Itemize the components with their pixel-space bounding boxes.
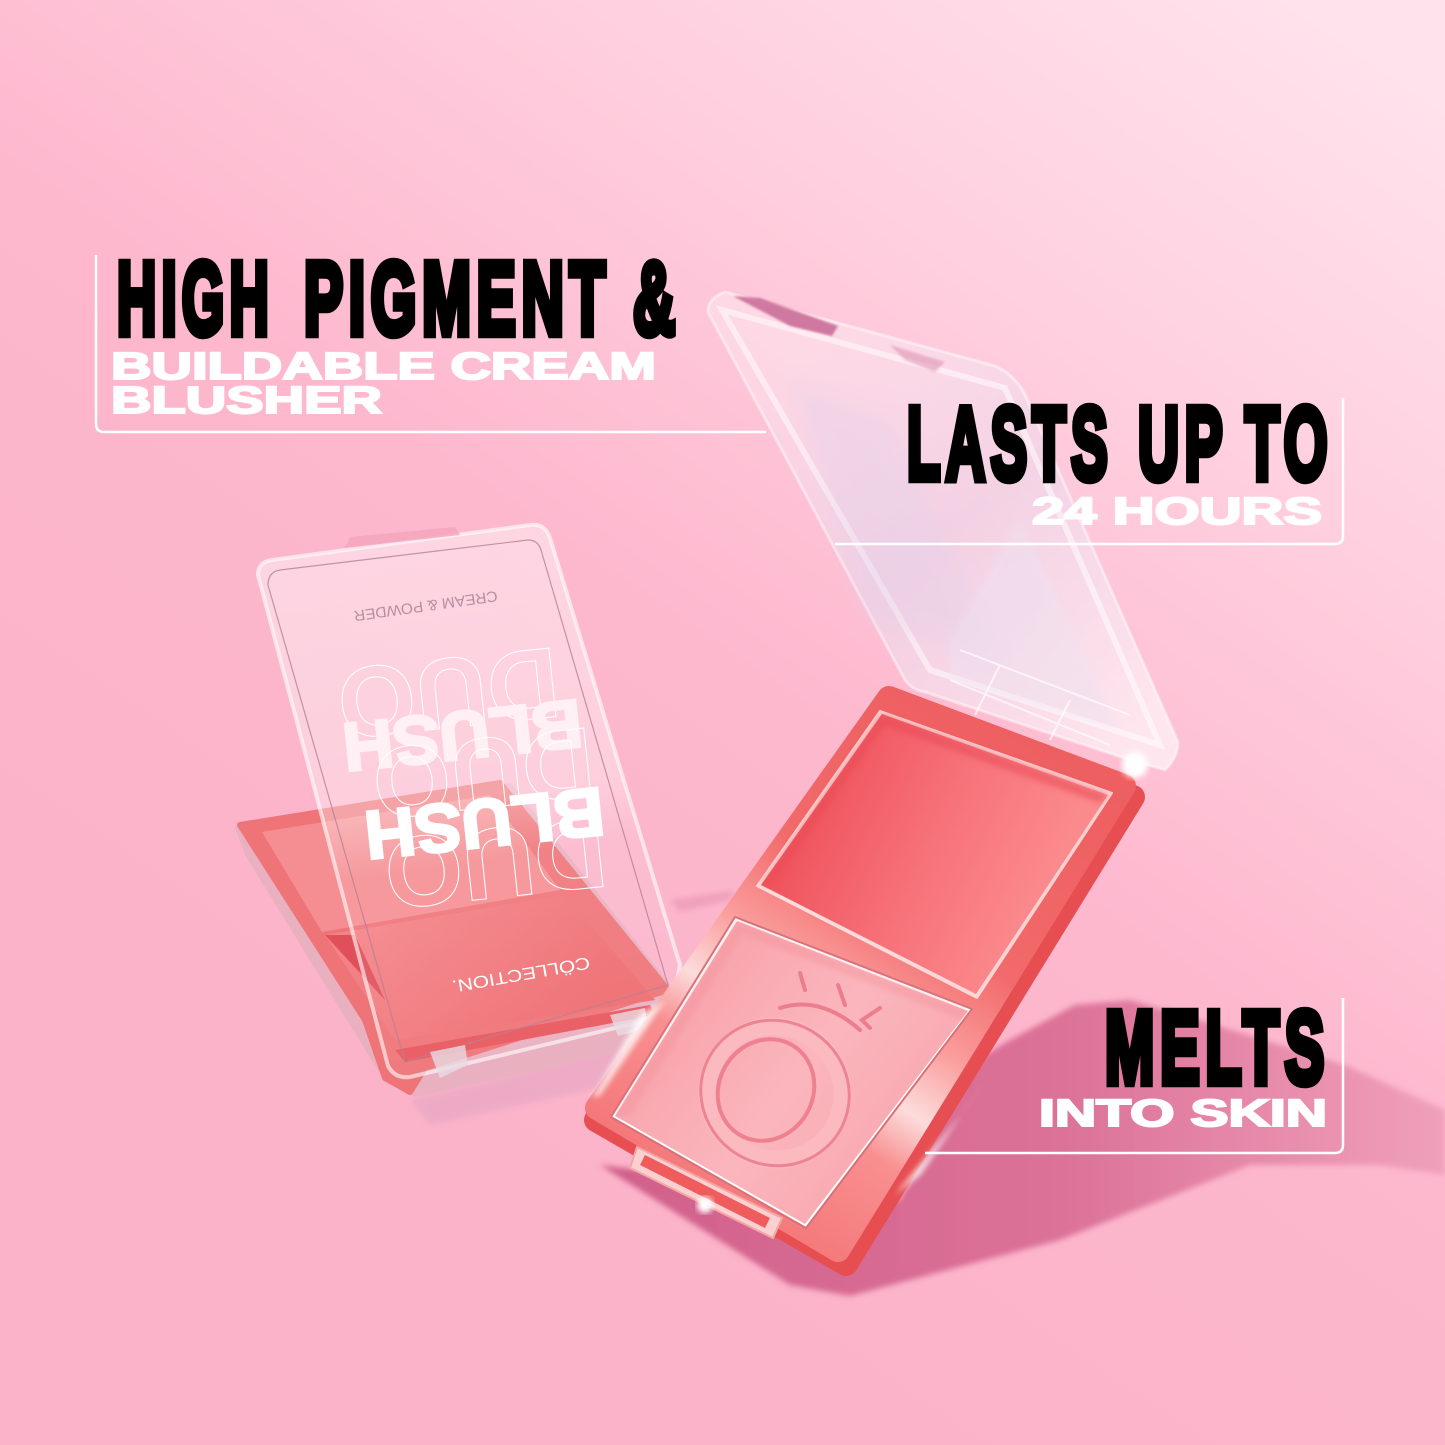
hinge slot [630, 1147, 782, 1238]
large compact frame [597, 698, 1124, 1250]
callout: melts into skin [925, 990, 1343, 1153]
lid print: COLLECTION logo: CÖLLECTION. [450, 953, 592, 996]
lid print: DUO outline 2: DUO [367, 706, 600, 840]
heading: HIGH [117, 241, 274, 356]
embossed crown O logo [674, 973, 880, 1193]
callout bracket [835, 398, 1343, 544]
heading: PIGMENT [304, 241, 611, 356]
powder blush pan [611, 917, 972, 1228]
large compact side wall [596, 700, 1133, 1264]
heading: & [633, 241, 681, 356]
lid print: DUO outline 1: DUO [332, 626, 565, 760]
callout bracket [96, 255, 766, 432]
lid edge reflection [733, 296, 838, 336]
small compact clear lid [258, 525, 680, 1078]
small compact reflection shadow [410, 1035, 680, 1125]
lid print: BLUSH 2: BLUSH [361, 773, 608, 873]
lid print: CREAM & POWDER: CREAM & POWDER [352, 587, 499, 624]
heading: TO [1245, 386, 1333, 501]
small compact tray [237, 783, 668, 1095]
large compact clear lid [708, 292, 1178, 778]
lid print: BLUSH 1: BLUSH [339, 685, 586, 785]
lid hinge moulding [950, 650, 1130, 745]
lid print: DUO outline 3: DUO [379, 796, 612, 930]
subheading: 24 HOURS [1032, 491, 1322, 533]
callout: high pigment [96, 241, 766, 432]
frame highlights [592, 1000, 985, 1195]
heading [117, 241, 681, 356]
heading: UP [1138, 386, 1228, 501]
lid inner reflection [790, 380, 1000, 660]
hinges [430, 1045, 468, 1078]
callout: lasts up to 24 hours [835, 386, 1343, 544]
subheading line 2: BLUSHER [111, 380, 382, 422]
callout bracket [925, 998, 1343, 1153]
small compact: open blush duo, back [237, 525, 680, 1125]
cast shadow of large compact [600, 890, 1445, 1296]
lid flare [1122, 752, 1148, 778]
subheading: INTO SKIN [1039, 1093, 1327, 1135]
heading: LASTS [907, 386, 1113, 501]
subheading line 1: BUILDABLE CREAM [111, 346, 656, 388]
large compact: open blush duo, front [592, 698, 1133, 1264]
cream blush pan [757, 711, 1112, 998]
